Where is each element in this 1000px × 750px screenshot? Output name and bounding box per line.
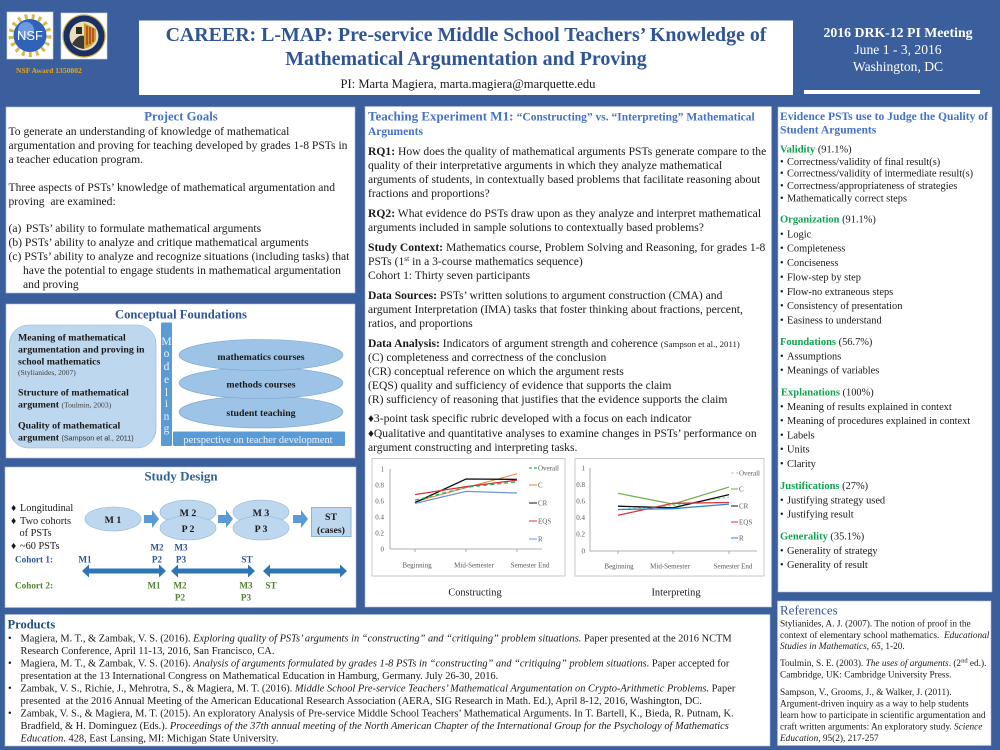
cohort 1 labels: Cohort 1: [15,554,53,564]
module flow diagram: P 3 [255,524,268,535]
research question 1: fractions and proportions? [368,187,490,200]
panel: project goals: and proving [23,278,79,291]
cohort 1 labels: M3 [174,542,188,552]
panel: project goals: Three aspects of PSTs’ knowledge of mathematical argumentation and [8,181,335,194]
organization list: • [780,316,784,326]
modeling vertical bar: e [164,374,169,386]
research question 2: arguments included in sample solutions to contextually based problems? [368,221,704,234]
justifications list [780,481,886,520]
foundations text box: school mathematics [18,356,100,368]
explanations list: • [780,430,784,442]
study context: Cohort 1: Thirty seven participants [368,269,531,282]
panel: evidence PSTs use: Evidence PSTs use to Judge the Quality of [780,110,988,123]
product citation 2: presentation at the 13 International Congress on Mathematical Education in Hamburg, Germany. July 26-30, 2016. [20,671,498,682]
explanations list: • [780,459,784,470]
panel: conceptual foundations [6,304,355,458]
line chart: constructing: C [538,482,543,490]
explanations list: Clarity [787,459,817,470]
line chart: interpreting: Semester End [714,562,753,570]
explanations list: • [780,444,784,456]
line chart: constructing: 0.2 [375,530,384,538]
meeting information: 2016 DRK-12 PI Meeting [823,25,973,40]
validity list: Correctness/validity of intermediate result(s) [787,168,973,180]
reference: Toulmin: Toulmin, S. E. (2003). The uses of arguments. (2 [780,659,961,669]
line chart: constructing: Mid-Semester [454,562,494,570]
organization list: Completeness [787,244,845,254]
reference: Sampson: craft written arguments: An exploratory study. Science [780,722,982,732]
rubric notes: argument constructing and interpreting tasks. [368,441,577,454]
teacher development ellipses: student teaching [226,408,296,419]
panel: products: Products [8,618,55,632]
foundations text box: (Stylianides, 2007) [18,368,76,377]
product citation 1: • [8,634,12,644]
validity list: Validity (91.1%) [780,144,852,156]
foundations list: Assumptions [787,352,841,362]
rubric notes [368,412,757,454]
panel: project goals: a teacher education program. [8,153,143,166]
foundations text box: argument (Sampson et al., 2011) [18,432,134,444]
product citation 3: presented at the 2016 Annual Meeting of the American Educational Research Association (AERA, SIG Research in Math. Ed.), April 8-12, 2016, Washington, DC. [20,696,702,707]
module flow diagram: (cases) [317,525,345,536]
panel: project goals: argumentation and proving for teaching developed by grades 1-8 PSTs in [8,139,348,152]
design bullets [11,503,73,552]
cohort 1 labels: M2 [150,542,164,552]
organization list: Consistency of presentation [787,301,903,312]
justifications list: Justifying strategy used [787,496,886,506]
line chart: constructing: EQS [538,518,551,526]
chart caption: interpreting: Interpreting [651,588,701,598]
organization list: • [780,258,784,269]
data analysis: (R) sufficiency of reasoning that justifies that the evidence supports the claim [368,393,727,406]
product citation 2: Magiera, M. T., & Zambak, V. S. (2016). Analysis of arguments formulated by grades 1-8 PSTs in “constructing” and “critiquing” problem situations. Paper accepted for [20,658,730,670]
line chart: interpreting: 1 [582,464,586,472]
line chart: interpreting: 0.2 [576,530,586,538]
line chart: constructing: 0.6 [375,498,384,506]
research question 1: RQ1: How does the quality of mathematical arguments PSTs generate compare to the [368,145,766,158]
study context: st [404,254,410,263]
cohort 2 labels: P2 [175,592,186,602]
foundations text box: argument (Toulmin, 2003) [18,400,112,410]
modeling vertical bar: g [164,423,170,435]
modeling vertical bar: M [161,336,172,348]
panel: project goals: proving are examined: [8,195,116,208]
validity list: • [780,181,784,192]
cohort timeline arrows [82,564,347,578]
cohort 2 labels [15,580,277,602]
generality list: Generality of strategy [787,546,878,557]
foundations text box: Meaning of mathematical [18,332,126,344]
reference: Toulmin: ed.). [968,658,986,669]
module flow diagram: M 3 [253,508,269,519]
foundations list: • [780,352,784,362]
line chart: constructing: 1 [380,466,384,474]
product citation 2: • [8,658,12,670]
line chart: constructing: R [538,536,543,544]
organization list: Easiness to understand [787,316,882,326]
cohort 1 labels: ST [241,554,253,564]
teacher development ellipses: mathematics courses [217,352,305,363]
panel: project goals [6,107,355,293]
panel: project goals: To generate an understanding of knowledge of mathematical [8,125,289,138]
data analysis [368,337,740,406]
cohort 1 labels: P2 [152,554,163,564]
justifications list: Justifying result [787,510,854,520]
explanations list: Meaning of results explained in context [787,402,952,413]
organization list: Logic [787,230,812,240]
product citation 3: Zambak, V. S., Richie, J., Mehrotra, S., & Magiera, M. T. (2016). Middle School Pre-service Teachers’ Mathematical Argumentation on Crypto-Arithmetic Problems. Paper [20,684,736,694]
icon: Marquette University seal [61,13,107,59]
explanations list: Units [787,444,810,456]
line chart: interpreting: 0.4 [576,514,586,522]
reference: Sampson: Sampson, V., Grooms, J., & Walker, J. (2011). [780,687,952,698]
title box: PI: Marta Magiera, marta.magiera@marquette.edu [341,77,596,91]
module flow diagram: ST [325,512,337,523]
product citation 4: Zambak, V. S., & Magiera, M. T. (2015). An exploratory Analysis of Pre-service Middle School Teachers’ Mathematical Arguments. In T. Bartell, K., Bieda, R. Putnam, K. [20,708,734,720]
title box: Mathematical Argumentation and Proving [285,48,647,70]
panel: project goals: (c) PSTs’ ability to analyze and recognize situations (including tasks) that [8,250,350,263]
organization list: • [780,287,784,298]
cohort 2 labels: Cohort 2: [15,580,53,590]
data sources: argument Interpretation (IMA) tasks that foster thinking about fractions, percent, [368,303,743,316]
product citation 2 [8,658,730,682]
cohort 2 labels: P3 [241,592,252,602]
line chart: constructing: 0.4 [375,514,384,522]
study context: Study Context: Mathematics course, Problem Solving and Reasoning, for grades 1-8 [368,241,766,254]
generality list: • [780,546,784,557]
modeling vertical bar [161,322,172,446]
modeling vertical bar: n [164,411,170,423]
module flow diagram: P 2 [182,524,195,535]
perspective bar [173,432,345,446]
experiment heading: Teaching Experiment M1: “Constructing” vs. “Interpreting” Mathematical [368,108,755,124]
foundations text box: Quality of mathematical [18,420,121,432]
explanations list: • [780,402,784,413]
line chart: constructing: Semester End [511,562,550,570]
cohort 1 labels: P3 [176,554,187,564]
reference: Sampson: learn how to participate in scientific argumentation and [780,710,986,721]
data sources [368,289,743,330]
line chart: interpreting [575,458,764,576]
cohort 2 labels: M1 [147,580,161,590]
organization list: • [780,230,784,240]
validity list: • [780,157,784,168]
rubric notes: ♦Qualitative and quantitative analyses to examine changes in PSTs’ performance on [368,427,757,440]
reference: Stylianides [780,618,990,652]
line chart: constructing: CR [538,500,548,508]
validity list: Correctness/validity of final result(s) [787,157,940,168]
design bullets: ~60 PSTs [20,541,59,552]
product citation 1 [8,634,732,657]
foundations list: Foundations (56.7%) [780,337,872,348]
reference: Toulmin: Cambridge, UK: Cambridge University Press. [780,670,951,680]
panel: study design [5,467,356,608]
title box [139,20,793,95]
module flow diagram [85,500,351,540]
modeling vertical bar: i [165,398,168,410]
experiment heading: Arguments [368,126,423,138]
data analysis: (C) completeness and correctness of the conclusion [368,351,606,364]
data analysis: (EQS) quality and sufficiency of evidence that supports the claim [368,379,671,392]
panel: conceptual foundations: Conceptual Foundations [115,308,247,322]
organization list: Conciseness [787,258,838,269]
product citation 1: Research Conference, April 11-13, 2016, San Francisco, CA. [20,646,274,657]
foundations list: Meanings of variables [787,366,879,376]
cohort 1 labels [15,542,253,564]
generality list: Generality of result [787,560,868,571]
panel: project goals: (b) PSTs’ ability to analyze and critique mathematical arguments [8,236,309,249]
meeting information [804,25,980,94]
foundations text box: argumentation and proving in [18,344,145,356]
title: CAREER: L-MAP: Pre-service Middle School Teachers’ Knowledge of [166,24,767,46]
reference: Toulmin [780,658,986,680]
generality list: • [780,560,784,571]
reference: Sampson: Education, 95(2), 217-257 [779,733,879,744]
explanations list: • [780,416,784,427]
rubric notes: ♦3-point task specific rubric developed with a focus on each indicator [368,412,691,425]
cohort 2 labels: M2 [173,580,187,590]
study context: in a 3-course mathematics sequence) [409,255,583,268]
organization list: • [780,244,784,254]
product citation 4 [8,708,734,744]
panel: evidence PSTs use [778,107,992,592]
module flow diagram: M 2 [180,508,196,519]
panel: project goals: PSTs’ ability to formulate mathematical arguments [26,222,262,235]
panel: study design: Study Design [144,468,218,484]
design bullets: ♦ [11,516,16,527]
explanations list: Meaning of procedures explained in context [787,416,970,427]
organization list: Flow-no extraneous steps [787,287,893,298]
reference: Stylianides: Stylianides, A. J. (2007). The notion of proof in the [780,618,971,630]
foundations text box [10,325,156,448]
design bullets: ♦ [11,503,16,514]
award number: NSF Award 1350802 [16,66,82,75]
panel: project goals: (a) [8,222,21,235]
module flow diagram: M 1 [105,515,121,526]
generality list: Generality (35.1%) [780,532,864,542]
foundations list [780,337,879,376]
modeling vertical bar: l [165,387,168,399]
study context: PSTs (1 [368,255,404,268]
study context [368,241,766,282]
organization list: • [780,301,784,312]
design bullets: ♦ [11,541,16,552]
line chart: interpreting: Overall [739,470,760,478]
teacher development ellipses [179,340,343,428]
line chart: interpreting: C [739,486,744,494]
line chart: interpreting: EQS [739,518,752,526]
generality list [780,532,878,571]
line chart: constructing: Beginning [402,562,432,570]
explanations list: Explanations (100%) [781,388,874,398]
product citation 1: Magiera, M. T., & Zambak, V. S. (2016). Exploring quality of PSTs’ arguments in “constructing” and “critiquing” problem situations. Paper presented at the 2016 NCTM [20,634,732,644]
product citation 3 [8,684,736,707]
data analysis: Data Analysis: Indicators of argument strength and coherence (Sampson et al., 2011) [368,337,740,350]
perspective bar: perspective on teacher development [183,435,333,446]
reference: Toulmin: nd [961,658,968,664]
line chart: interpreting: R [739,534,744,542]
explanations list: Labels [787,430,815,442]
validity list: Correctness/appropriateness of strategies [787,181,957,192]
research question 2: RQ2: What evidence do PSTs draw upon as they analyze and interpret mathematical [368,207,761,220]
line chart: constructing: 0.8 [375,482,384,490]
panel: teaching experiment [365,106,772,607]
organization list: Flow-step by step [787,272,861,284]
line chart: constructing: Overall [538,464,559,472]
line chart: interpreting: 0.6 [576,498,586,506]
product citation 3: • [8,684,12,694]
explanations list [780,388,970,470]
modeling vertical bar: d [164,361,170,373]
icon: NSF logo: NSF [17,28,43,43]
organization list: • [780,272,784,284]
justifications list: • [780,496,784,506]
reference: Stylianides: Studies in Mathematics, 65, 1-20. [780,642,905,652]
product citation 4: • [8,708,12,720]
panel: project goals: have the potential to engage students in mathematical argumentation [23,264,341,277]
panel: project goals: Project Goals [144,110,218,124]
research question 1: arguments of students, in contextually based problems that facilitate reasoning about [368,173,761,186]
cohort 2 labels: ST [265,580,277,590]
validity list: • [780,194,784,204]
reference: Sampson: Argument-driven inquiry as a way to help students [780,700,969,710]
design bullets: Longitudinal [20,503,73,514]
validity list: Mathematically correct steps [787,194,907,204]
research question 1: quality of their interpretative arguments in which they analyze mathematical [368,159,722,172]
data sources: Data Sources: PSTs’ written solutions to argument construction (CMA) and [368,289,723,302]
icon: NSF logo [7,12,53,59]
product citation 4: Education. 428, East Lansing, MI: Michigan State University. [20,734,279,744]
validity list [780,144,973,204]
research question 1 [368,145,766,200]
panel: evidence PSTs use: Student Arguments [780,124,877,136]
panel: products [5,614,770,746]
cohort 1 labels: M1 [78,554,92,564]
research question 2 [368,207,761,234]
experiment heading [368,108,755,138]
panel: references: References [780,602,838,618]
organization list: Organization (91.1%) [780,214,876,226]
panel: references [778,601,991,746]
foundations list: • [780,366,784,376]
data analysis: (CR) conceptual reference on which the argument rests [368,365,624,378]
organization list [780,214,903,326]
line chart: interpreting: 0 [582,548,586,556]
validity list: • [780,168,784,180]
line chart: interpreting: Beginning [604,562,634,570]
line chart: interpreting: 0.8 [576,481,586,489]
chart caption: constructing: Constructing [448,588,502,598]
line chart: constructing: 0 [380,546,384,554]
line chart: interpreting: Mid-Semester [650,562,690,570]
cohort 2 labels: M3 [239,580,253,590]
design bullets: of PSTs [20,528,52,539]
data sources: ratios, and proportions [368,317,473,330]
design bullets: Two cohorts [20,516,71,527]
line chart: interpreting: CR [739,502,749,510]
teacher development ellipses: methods courses [226,380,296,390]
modeling vertical bar: o [164,348,170,360]
foundations text box: Structure of mathematical [18,388,129,398]
justifications list: Justifications (27%) [780,481,868,492]
meeting information: Washington, DC [853,59,943,74]
meeting information: June 1 - 3, 2016 [854,42,942,57]
product citation 4: Bradfield, & H. Dominguez (Eds.). Proceedings of the 37th annual meeting of the North American Chapter of the International Group for the Psychology of Mathematics [20,721,729,732]
line chart: constructing [372,458,565,576]
reference: Sampson [779,687,986,744]
reference: Stylianides: context of elementary school mathematics. Educational [780,630,990,641]
justifications list: • [780,510,784,520]
